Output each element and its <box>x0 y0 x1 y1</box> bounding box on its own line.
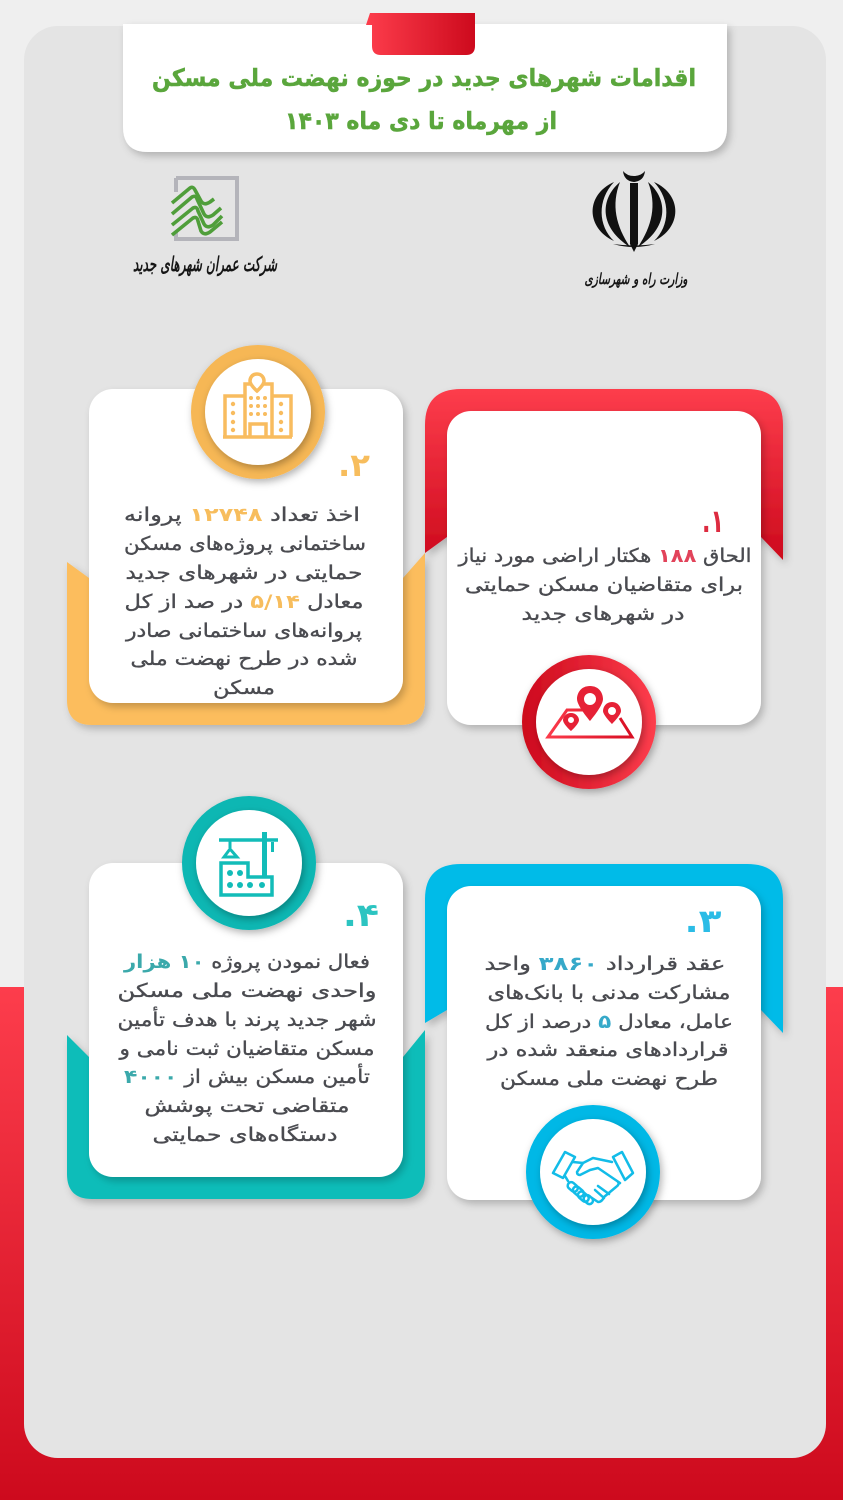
card 2 text: اخذ تعداد ۱۲۷۴۸ پروانه <box>124 504 360 526</box>
white card <box>89 863 403 1177</box>
card 3 text: طرح نهضت ملی مسکن <box>500 1068 718 1090</box>
panel: card 3 contracts <box>425 864 783 1239</box>
card 1 text: در شهرهای جدید <box>522 603 684 625</box>
card 4 text: مسکن متقاضیان ثبت نامی و <box>118 1038 374 1060</box>
white card <box>89 389 403 703</box>
title line 2: از مهرماه تا دی ماه ۱۴۰۳ <box>285 107 557 135</box>
panel: card 4 project activation <box>67 796 425 1199</box>
icon circle: building <box>191 345 325 479</box>
card 2 text <box>124 504 366 699</box>
card 2 text: حمایتی در شهرهای جدید <box>126 562 362 584</box>
card 2 text: ساختمانی پروژه‌های مسکن <box>124 533 366 555</box>
card 4 text <box>118 951 376 1146</box>
card 3 text: عقد قرارداد ۳۸۶۰ واحد <box>484 953 726 975</box>
icon circle: map pins <box>522 655 656 789</box>
card 2 text: مسکن <box>213 677 275 699</box>
card 3 text: عامل، معادل ۵ درصد از کل <box>485 1011 733 1033</box>
red backing <box>425 389 783 560</box>
icon circle: handshake <box>526 1105 660 1239</box>
logo: ministry emblem <box>584 171 688 288</box>
card 4 text: دستگاه‌های حمایتی <box>152 1123 338 1146</box>
card 4 text: فعال نمودن پروژه ۱۰ هزار <box>123 951 370 973</box>
red tab <box>366 13 475 55</box>
teal backing <box>67 1030 425 1199</box>
panel: card 2 building permits <box>67 345 425 725</box>
logo: ministry emblem: وزارت راه و شهرسازی <box>584 270 688 288</box>
card 3 text: قراردادهای منعقد شده در <box>486 1039 728 1061</box>
logo: new cities development company <box>133 178 278 277</box>
card 2 text: معادل ۵/۱۴ در صد از کل <box>124 591 364 613</box>
card 4 text: واحدی نهضت ملی مسکن <box>118 980 376 1002</box>
panel: card 1 land annexation <box>425 389 783 789</box>
card 4 text: شهر جدید پرند با هدف تأمین <box>118 1006 376 1031</box>
yellow backing <box>67 553 425 725</box>
number 3: ۳. <box>684 902 722 940</box>
blue backing <box>425 864 783 1033</box>
number 1: ۱. <box>702 502 724 540</box>
title banner <box>123 13 727 152</box>
card 1 text: الحاق ۱۸۸ هکتار اراضی مورد نیاز <box>457 545 752 567</box>
card 3 text: مشارکت مدنی با بانک‌های <box>488 982 730 1004</box>
card 4 text: تأمین مسکن بیش از ۴۰۰۰ <box>124 1063 370 1088</box>
card 4 text: متقاضی تحت پوشش <box>144 1095 350 1117</box>
title line 1: اقدامات شهرهای جدید در حوزه نهضت ملی مسکن <box>152 64 696 92</box>
number 2: ۲. <box>338 446 370 484</box>
icon circle: crane <box>182 796 316 930</box>
card 2 text: شده در طرح نهضت ملی <box>130 648 358 670</box>
white card <box>447 411 761 725</box>
card 1 text: برای متقاضیان مسکن حمایتی <box>465 574 743 596</box>
card 1 text <box>457 545 752 625</box>
card 2 text: پروانه‌های ساختمانی صادر <box>125 620 362 642</box>
number 4: ۴. <box>343 896 379 934</box>
card 3 text <box>484 953 733 1090</box>
logo: new cities development company: شرکت عمران شهرهای جدید <box>133 252 278 277</box>
white card <box>447 886 761 1200</box>
